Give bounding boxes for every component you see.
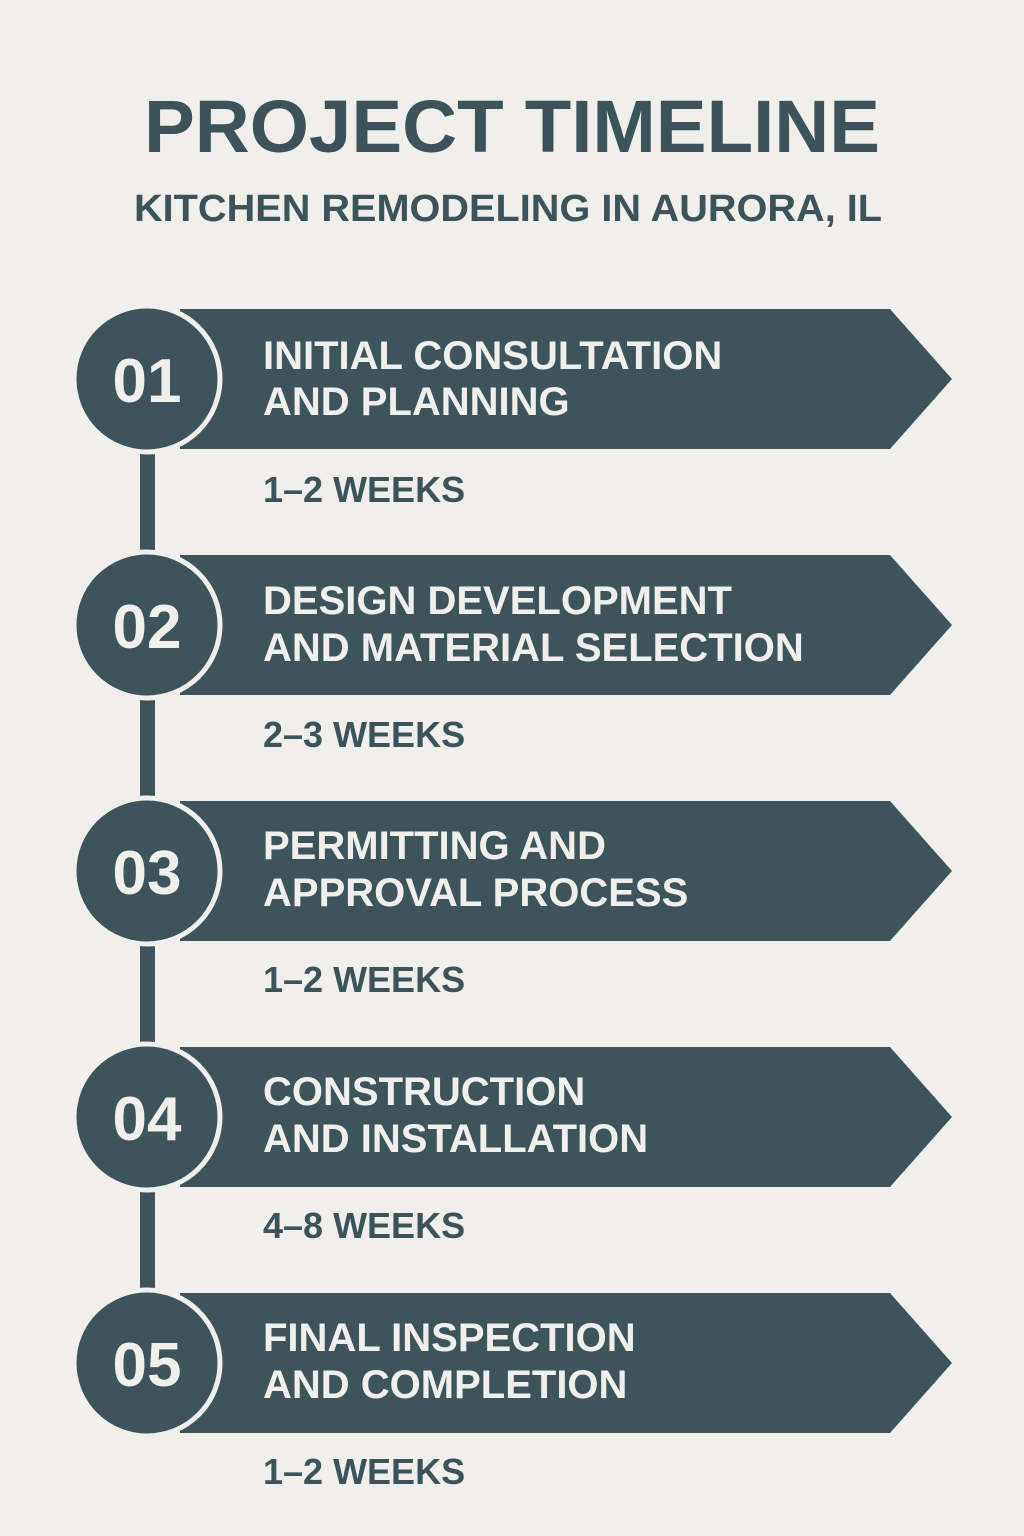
banner 04 [180, 1047, 952, 1187]
banner 03 [180, 801, 952, 941]
step 01: AND PLANNING [263, 380, 570, 424]
step 01: 01 [113, 347, 181, 416]
banner 02 [180, 555, 952, 695]
step 03: 03 [113, 839, 181, 908]
step 05: AND COMPLETION [263, 1363, 627, 1407]
step 04 [74, 1044, 952, 1246]
title: PROJECT TIMELINE [144, 85, 880, 168]
circle 01 [74, 306, 220, 452]
step title 04: CONSTRUCTION [263, 1070, 585, 1114]
step 04: AND INSTALLATION [263, 1117, 648, 1161]
duration 05: 1–2 WEEKS [263, 1451, 465, 1492]
duration 04: 4–8 WEEKS [263, 1205, 465, 1246]
step 05 [74, 1290, 952, 1492]
timeline connector line [140, 380, 155, 1364]
step title 02: DESIGN DEVELOPMENT [263, 579, 732, 623]
circle 03 [74, 798, 220, 944]
duration 02: 2–3 WEEKS [263, 714, 465, 755]
step 02: AND MATERIAL SELECTION [263, 626, 804, 670]
step 04: 04 [113, 1085, 182, 1154]
subtitle: KITCHEN REMODELING IN AURORA, IL [134, 188, 882, 230]
duration 03: 1–2 WEEKS [263, 959, 465, 1000]
step 02: 02 [113, 593, 181, 662]
step title 01: INITIAL CONSULTATION [263, 334, 722, 378]
circle 05 [74, 1290, 220, 1436]
step 03 [74, 798, 952, 1000]
step 05: 05 [113, 1331, 181, 1400]
step 03: APPROVAL PROCESS [263, 871, 688, 915]
banner 01 [180, 309, 952, 449]
step title 05: FINAL INSPECTION [263, 1316, 636, 1360]
step 02 [74, 552, 952, 755]
step title 03: PERMITTING AND [263, 824, 606, 868]
banner 05 [180, 1293, 952, 1433]
circle 02 [74, 552, 220, 698]
duration 01: 1–2 WEEKS [263, 469, 465, 510]
circle 04 [74, 1044, 220, 1190]
step 01 [74, 306, 952, 510]
